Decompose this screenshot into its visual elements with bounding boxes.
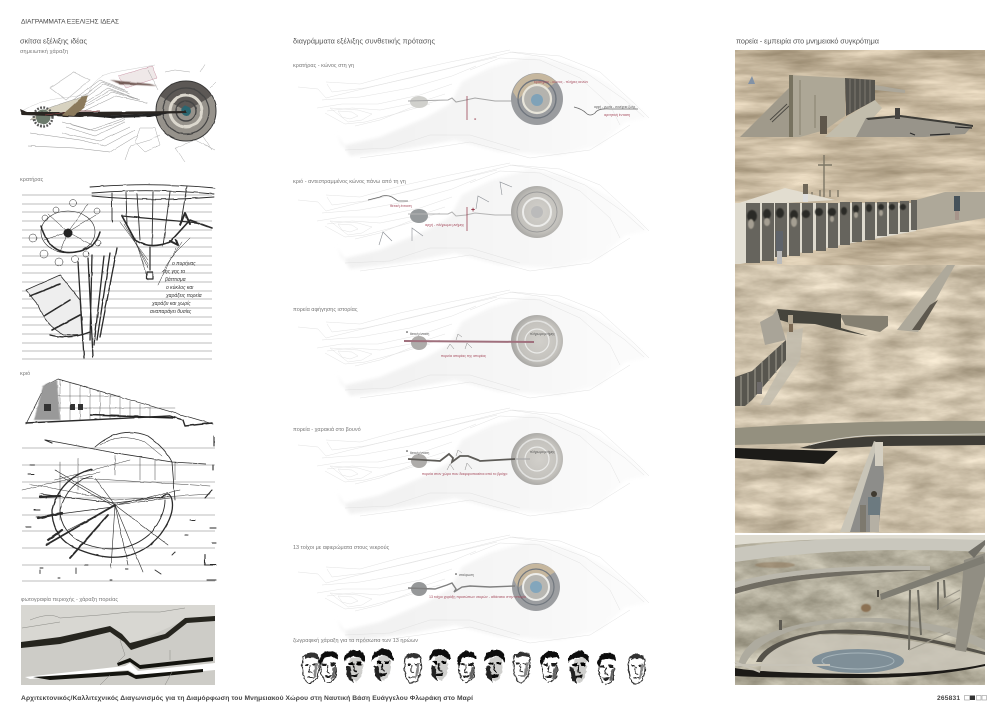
platform [856,115,973,137]
diagram row 2: ram, inverted cone above the earth: + [471,207,475,214]
person [871,491,877,497]
crater disc [511,315,563,367]
site plan [298,163,649,271]
entry code: 265831 [937,695,960,702]
diagram row 3: route narrating history [293,290,649,398]
red level marker [466,96,468,120]
render 4: carved path with figure [735,418,985,533]
diagram row 4: route carved in the mountain [293,408,649,516]
mound [411,582,427,596]
stepped fins [735,340,786,406]
diagram row 5: 13 walls [293,535,649,643]
handwritten note: ο πυρήνας [172,260,196,267]
beam [880,556,985,600]
photo: cracked ground [21,605,215,685]
handwritten note: της γης το [163,269,185,275]
handwritten note: βάπτισμα [164,277,186,283]
portrait panels [746,200,917,263]
diagram row 1: crater, cone in the earth: αρχή - γωνία - συνέχεια ζωής [594,105,636,109]
dark wall [777,309,868,336]
light ramp [760,328,803,405]
dark slit under ring [800,436,985,449]
small mound [410,96,428,108]
ram mound [410,209,428,223]
sketch 1: plan with crater and path [20,64,216,162]
lit faces [748,210,883,229]
cross structure [812,155,838,197]
label: semiotic sketch: σημειωτική χάραξη [20,48,68,55]
carved route [408,454,515,462]
diagram row 4: route carved in the mountain: θετική ένταση [410,451,429,455]
mound [411,336,427,350]
diagram row 1: crater, cone in the earth: - [474,116,477,123]
diagram row 2: ram, inverted cone above the earth: αρχή - πλήρωμα μνήμης [425,223,464,227]
portrait faces [747,204,906,222]
central wall [843,442,884,532]
diagonal concrete [897,265,955,332]
wall base [735,203,916,264]
diagram row 3: route narrating history: πλήρωμα μνήμης [530,332,555,336]
white plinth [736,188,835,206]
grey wall [840,315,888,332]
handwritten note: αναπαράγει θυσίες [150,309,192,315]
crater disc [511,186,563,238]
heading: route experience column: πορεία - εμπειρία στο μνημειακό συγκρότημα [736,36,880,46]
label: πορεία αφήγησης ιστορίας [293,306,358,313]
mound [411,454,427,468]
crater disc [511,73,563,125]
people [788,315,793,324]
path [408,98,537,102]
heading: sketches column: σκίτσα εξέλιξης ιδέας [20,36,87,46]
sketch 3: ram section [26,379,213,426]
concrete ring [735,421,985,445]
sketch 4: circular plan on ruled paper [22,432,216,581]
base curve [735,664,985,678]
diagram row 5: 13 walls: σταύρωση [459,573,474,577]
diagram row 4: route carved in the mountain: πορεία στον χώρο που διαφοροποιείται από το βράχο [422,472,507,476]
sheet indicator squares [964,696,986,700]
crater disc [511,433,563,485]
render 2: thirteen walls with portraits [735,137,985,265]
upper ramp [735,570,930,594]
people [820,116,827,134]
label: crater: κρατήρας [20,176,44,183]
diagram row 3: route narrating history: πορεία ιστορίας της ιστορίας [441,354,486,358]
handwritten note [150,260,202,315]
heading: diagrams column: διαγράμματα εξέλιξης συνθετικής πρότασης [293,36,435,46]
render 5: crater interior with ramps [735,535,985,685]
site plan [298,290,649,398]
tall wall [955,553,985,652]
render 3: path descending beside stepped walls [735,265,985,418]
label: κρατήρας - κώνος στη γη [293,62,354,69]
slatted wall [845,78,875,116]
top rim [735,537,985,562]
diagram row 2: ram, inverted cone above the earth: θετική ένταση [390,204,412,208]
stains and people [861,604,871,612]
render 1: wall and platform [735,50,985,137]
label: ram: κριό [20,370,30,377]
diagram row 5: 13 walls: 13 τοίχοι χαράξη προσώπων νεκρών - αθάνατοι στην ιστορία [429,595,526,599]
diagram row 2: ram, inverted cone above the earth [293,163,649,271]
diagram row 1: crater, cone in the earth: αρνητική ένταση [604,113,630,117]
straight red route [404,341,534,342]
path [408,212,530,216]
lit floor [760,635,985,675]
thirteen portrait faces [302,649,645,684]
slope [740,88,789,137]
people [776,231,783,251]
black wedge [735,448,838,464]
handwritten note: χαράζει και χωρίς [151,301,191,307]
diagram row 3: route narrating history: θετική ένταση [410,332,429,336]
diagram row 4: route carved in the mountain: πλήρωμα μνήμης [530,450,555,454]
section profile [368,196,408,201]
crater disc [512,563,560,611]
red level marker [466,207,468,231]
site plan [298,408,649,516]
back wall [916,192,985,230]
label: 13 τοίχοι με αφιερώματα στους νεκρούς [293,544,390,551]
sketch 2: crater hand sketch on ruled paper [22,185,215,359]
handwritten note: ο κύκλος και [166,284,194,291]
concrete wall [789,75,845,137]
site plan [298,535,649,643]
section profile [574,107,638,115]
label: κριό - αντεστραμμένος κώνος πάνω από τη γη [293,178,406,185]
view angle markers [379,182,512,245]
main title: ΔΙΑΓΡΑΜΜΑΤΑ ΕΞΕΛΙΞΗΣ ΙΔΕΑΣ [21,18,119,26]
site plan [298,50,649,158]
beam legs [909,580,945,650]
label: site photo: φωτογραφία περιοχής - χάραξη πορείας [21,596,118,603]
label: faces: ζωγραφική χάραξη για τα πρόσωπα των 13 ηρώων [293,637,418,644]
diagram row 1: crater, cone in the earth: κρατήρας - κώνος - πλήρες κενών [534,80,588,84]
basin [812,649,904,673]
handwritten note: χαράξεις πορεία [165,293,202,299]
footer competition title: Αρχιτεκτονικός/Καλλιτεχνικός Διαγωνισμός για τη Διαμόρφωση του Μνημειακού Χώρου στη Ναυτική Βάση Ευάγγελου Φλωράκη στο Μαρί [21,694,473,702]
lower ramp ring [738,618,985,668]
view angle markers [447,450,472,470]
walkway [825,100,882,137]
label: πορεία - χαρακιά στο βουνό [293,426,361,433]
diagram row 1: crater, cone in the earth [293,50,649,158]
zigzag route [408,583,515,592]
view angle markers [447,334,472,349]
